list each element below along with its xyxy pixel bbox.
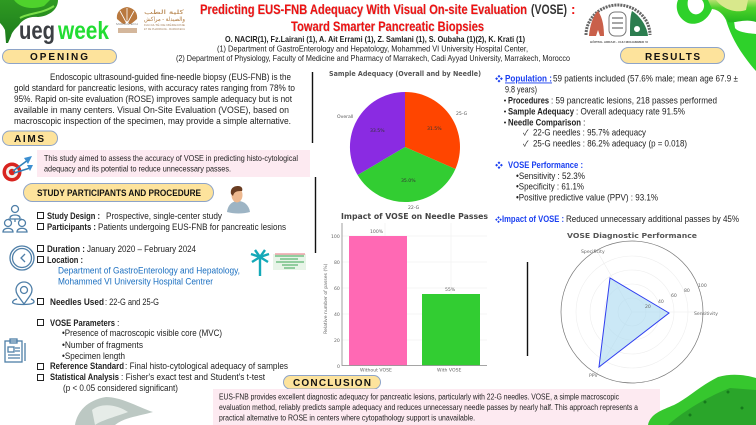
results text: VOSE performance: ❖	[495, 161, 503, 170]
panel: aims: adequacy and its potential to reduce unnecessary passes.	[44, 164, 231, 174]
results text: population and procedures: Needle Comparison	[508, 118, 581, 128]
chart: sample adequacy pie: 33.5%	[370, 128, 385, 134]
chart: sample adequacy pie	[329, 70, 481, 211]
results text: population and procedures: Procedures	[508, 96, 549, 106]
title	[200, 2, 576, 35]
title: Toward Smarter Pancreatic Biopsies	[291, 19, 484, 34]
chart: impact of VOSE on needle passes: 55%	[445, 287, 456, 293]
results text: population and procedures: 22-G needles : 95.7% adequacy	[533, 128, 646, 138]
list: study design: Prospective, single-center study	[106, 211, 223, 221]
text block: opening: available in many centers. Visual On-Site Evaluation (VOSE), based on	[14, 105, 289, 115]
results text: VOSE performance: •Positive predictive value (PPV) : 93.1%	[516, 192, 658, 202]
text block: opening	[14, 72, 295, 126]
authors and affiliations: O. NACIR(1), Fz.Lairani (1), A. Ait Errami (1), Z. Samlani (1), S. Oubaha (1)(2), K. Krati (1)	[225, 35, 525, 44]
list: study design	[38, 211, 287, 265]
heading: study participants and procedure: STUDY PARTICIPANTS AND PROCEDURE	[37, 187, 201, 198]
logo: ueg week: week	[57, 17, 109, 45]
chart: VOSE diagnostic performance radar	[561, 232, 718, 383]
results text: impact of VOSE: ❖	[495, 216, 502, 224]
heading: conclusion	[284, 376, 380, 389]
text: hospital location: Department of GastroEnterology and Hepatology,	[58, 266, 240, 276]
bar: with VOSE	[422, 294, 480, 366]
list: needles and VOSE parameters: Statistical Analysis	[50, 372, 119, 382]
list: needles and VOSE parameters: Reference Standard	[50, 361, 124, 371]
chart: sample adequacy pie: 22-G	[408, 205, 420, 211]
results text: VOSE performance: •Specificity : 61.1%	[516, 182, 584, 192]
results text: impact of VOSE: Impact of VOSE :	[502, 214, 564, 224]
chart: VOSE diagnostic performance radar: 40	[658, 299, 664, 305]
text block: opening: Endoscopic ultrasound-guided fine-needle biopsy (EUS-FNB) is the	[50, 72, 291, 82]
chart: VOSE diagnostic performance radar: 60	[671, 293, 677, 299]
chart: sample adequacy pie: 35.0%	[401, 178, 416, 184]
list: needles and VOSE parameters: : 22-G and 25-G	[105, 297, 159, 307]
list: study design: Patients undergoing EUS-FNB for pancreatic lesions	[98, 222, 287, 232]
results text: population and procedures: Sample Adequacy	[508, 106, 574, 116]
panel: conclusion: evaluation method, reliably predicts sample adequacy and reduces unnecessary needle passes by nearly half. This approach represents a	[219, 403, 638, 412]
text block: opening: gold standard for pancreatic lesions, with accuracy rates ranging from 78% to	[14, 83, 295, 93]
results text: impact of VOSE: Reduced unnecessary additional passes by 45%	[566, 214, 739, 224]
text: hospital location	[58, 266, 240, 286]
decoration: top-right green bacterium	[677, 0, 756, 71]
text block: opening: 95%. Rapid on-site evaluation (ROSE) improves sample adequacy but is not	[14, 94, 292, 104]
chart: sample adequacy pie: 31.5%	[427, 126, 442, 132]
authors and affiliations	[176, 35, 570, 63]
chart: VOSE diagnostic performance radar: Specificity	[581, 249, 605, 255]
text block: opening: macroscopic inspection of the specimen, may provide a simple alternative.	[14, 116, 291, 126]
chart: impact of VOSE on needle passes: 100	[331, 234, 340, 240]
icon: clock	[10, 246, 34, 270]
heading: opening	[2, 50, 116, 64]
list: needles and VOSE parameters: (p < 0.05 considered significant)	[63, 383, 178, 393]
illustration: liver	[75, 397, 153, 425]
list: study design: Participants :	[47, 222, 96, 232]
list: needles and VOSE parameters: : Final histo-cytological adequacy of samples	[125, 361, 289, 371]
text: hospital location: Mohammed VI University Hospital Centrer	[58, 276, 213, 286]
logo: ueg week	[19, 17, 109, 45]
list: study design: Location :	[47, 255, 83, 265]
results text: VOSE performance: •Sensitivity : 52.3%	[516, 171, 585, 181]
results text: population and procedures: ❖	[495, 74, 503, 84]
decoration: bottom-right green bacterium	[648, 375, 756, 425]
results text: population and procedures: ✓	[523, 128, 529, 138]
list: needles and VOSE parameters: : Fisher's exact test and Student's t-test	[121, 372, 266, 382]
list: needles and VOSE parameters: •Specimen length	[62, 351, 125, 361]
chart: VOSE diagnostic performance radar: 20	[645, 304, 651, 310]
logo: Marrakech faculty of medicine: كلية الطب	[144, 9, 184, 16]
logo: ueg week: ueg	[19, 17, 55, 45]
list: needles and VOSE parameters	[38, 297, 289, 393]
results text: population and procedures: 9.8 years)	[505, 84, 537, 94]
logo: Marrakech faculty of medicine: والصيدلة - مراكش	[144, 16, 185, 23]
results text: impact of VOSE	[495, 214, 739, 224]
icon: clipboard	[5, 339, 25, 362]
list: needles and VOSE parameters: Needles Used	[50, 297, 104, 307]
title: (VOSE)	[531, 2, 567, 17]
results text: VOSE performance: VOSE Performance :	[508, 160, 583, 170]
title: Predicting EUS-FNB Adequacy With Visual On-site Evaluation	[200, 2, 527, 17]
logo: hepato-gastroenterology department: HÔPITAL ARRAZI - CHU MOHAMMED VI	[590, 39, 648, 44]
panel: conclusion	[213, 389, 660, 425]
bar: without VOSE	[349, 236, 407, 366]
chart: impact of VOSE on needle passes: 40	[334, 312, 340, 318]
title: Toward Smarter Pancreatic Biopsies	[292, 20, 485, 35]
results text: population and procedures: 59 patients included (57.6% male; mean age 67.9 ±	[553, 74, 738, 84]
results text: population and procedures: : Overall adequacy rate 91.5%	[576, 106, 685, 116]
chart: VOSE diagnostic performance radar: 80	[684, 288, 690, 294]
panel: aims: This study aimed to assess the accuracy of VOSE in predicting histo-cytological	[44, 153, 298, 163]
list: needles and VOSE parameters: •Presence of macroscopic visible core (MVC)	[62, 328, 222, 338]
results text: population and procedures: : 59 pancreatic lesions, 218 passes performed	[551, 96, 717, 106]
chart: impact of VOSE on needle passes: 100%	[370, 229, 384, 235]
chart: impact of VOSE on needle passes: 80	[334, 260, 340, 266]
results text: population and procedures: :	[583, 118, 586, 128]
icon: people network	[3, 206, 27, 232]
list: study design: Duration :	[47, 244, 85, 254]
list: needles and VOSE parameters: :	[117, 318, 119, 328]
logo: hospital palm	[251, 250, 306, 276]
list: needles and VOSE parameters: •Number of fragments	[62, 340, 144, 350]
chart: impact of VOSE on needle passes: With VOSE	[437, 368, 461, 374]
icon: person	[227, 186, 250, 214]
decoration: top-left green bacterium	[0, 0, 58, 43]
logo: Marrakech faculty of medicine: ET DE PHARMACIE - MARRAKECH	[144, 27, 185, 31]
logo: hepato-gastroenterology department	[586, 5, 650, 44]
results text: VOSE performance	[495, 160, 658, 202]
results text: population and procedures: 25-G needles : 86.2% adequacy (p = 0.018)	[533, 138, 687, 148]
panel: conclusion: practical alternative to ROSE in centers where cytopathology support is unavailable.	[219, 414, 475, 422]
panel: conclusion: EUS-FNB provides excellent diagnostic adequacy for pancreatic lesions, particularly with 22-G needles. VOSE, a simple macroscopic	[219, 392, 619, 402]
heading: aims	[2, 131, 58, 146]
title: Predicting EUS-FNB Adequacy With Visual On-site Evaluation	[201, 3, 528, 18]
chart: VOSE diagnostic performance radar: PPV	[589, 373, 599, 379]
heading: aims: AIMS	[14, 134, 44, 145]
chart: impact of VOSE on needle passes: 60	[334, 286, 340, 292]
list: study design: Study Design :	[47, 211, 100, 221]
chart: VOSE diagnostic performance radar: Sensitivity	[694, 311, 718, 317]
results text: population and procedures	[495, 74, 738, 148]
heading: study participants and procedure	[24, 184, 214, 202]
logo: Marrakech faculty of medicine	[116, 7, 185, 33]
title: :	[571, 2, 576, 17]
results text: population and procedures: ✓	[523, 140, 529, 148]
panel: aims	[37, 150, 310, 177]
authors and affiliations: (1) Department of GastroEnterology and Hepatology, Mohammed VI University Hospital Center,	[217, 44, 528, 54]
chart: impact of VOSE on needle passes: Impact of VOSE on Needle Passes	[341, 212, 488, 221]
chart: impact of VOSE on needle passes: Relative number of passes (%)	[323, 263, 329, 334]
chart: impact of VOSE on needle passes: 0	[337, 364, 340, 370]
icon: target with darts	[2, 156, 33, 182]
results text: population and procedures: Population :	[505, 74, 552, 84]
chart: impact of VOSE on needle passes: Without VOSE	[360, 368, 392, 374]
logo: Marrakech faculty of medicine: MARRAKECH	[116, 22, 138, 26]
chart: VOSE diagnostic performance radar: VOSE Diagnostic Performance	[567, 232, 697, 240]
chart: sample adequacy pie: Overall	[337, 114, 353, 120]
logo: Marrakech faculty of medicine: FACULTÉ DE MÉDECINE	[144, 22, 185, 27]
heading: opening: OPENING	[30, 52, 88, 63]
chart: VOSE diagnostic performance radar: 100	[698, 283, 707, 289]
heading: results: RESULTS	[645, 52, 700, 63]
heading: conclusion: CONCLUSION	[293, 378, 371, 389]
divider lines	[312, 72, 528, 356]
chart: sample adequacy pie: Sample Adequacy (Overall and by Needle)	[329, 70, 481, 78]
icon: location pin	[13, 282, 34, 304]
authors and affiliations: (2) Department of Physiology, Faculty of Medicine and Pharmacy of Marrakech, Cadi Ayyad University, Marrakech, Morocco	[176, 54, 570, 63]
chart: impact of VOSE on needle passes	[323, 212, 488, 374]
heading: results	[620, 48, 724, 64]
chart: impact of VOSE on needle passes: 20	[334, 338, 340, 344]
list: needles and VOSE parameters: VOSE Parameters	[50, 318, 115, 328]
list: study design: January 2020 – February 2024	[87, 244, 196, 254]
chart: sample adequacy pie: 25-G	[456, 111, 468, 117]
